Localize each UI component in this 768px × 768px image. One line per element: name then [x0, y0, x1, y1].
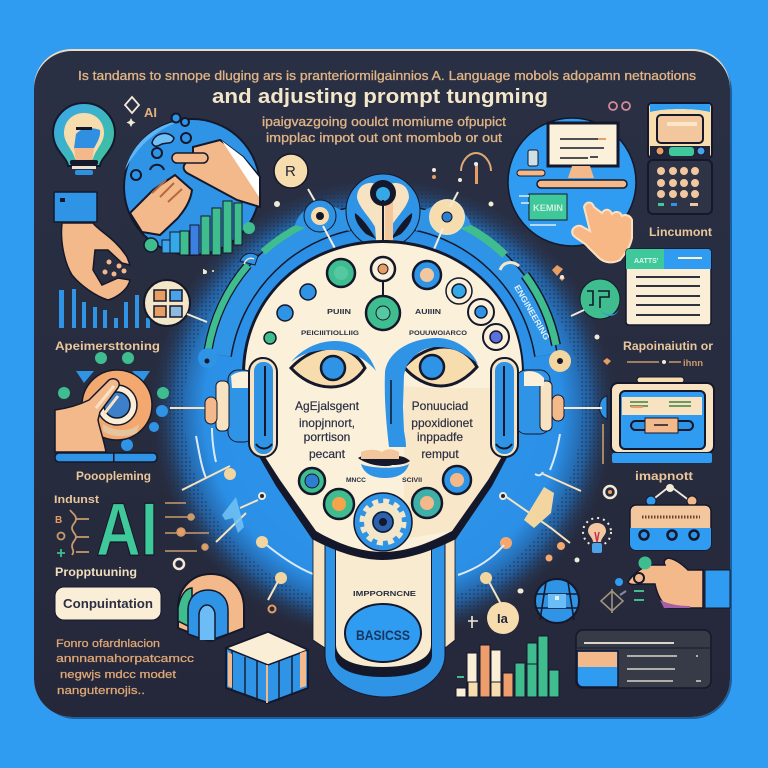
header text: [78, 68, 697, 145]
label: prompt tuning: Propptuuning: [55, 567, 137, 579]
jaw side bands: [272, 468, 496, 538]
text on left cheek: AgEjalsgent: [295, 399, 360, 413]
icon: gauge: [432, 153, 494, 206]
button: computation: Conpuintation: [63, 596, 153, 611]
button: computation: [55, 587, 161, 620]
antenna node left: [295, 200, 354, 254]
icon: hand pressing dial: [55, 352, 169, 462]
text on right cheek: remput: [421, 447, 459, 461]
icon: compass mark: [601, 589, 623, 613]
chin sensors and gear: [299, 466, 471, 551]
icon: sparkles and AI label: AI: [144, 105, 157, 120]
small ring ornament: [174, 559, 184, 569]
title: and adjusting prompt tungming: [212, 86, 548, 108]
text on right cheek: [411, 399, 473, 461]
button: basics: [345, 604, 421, 662]
chart: colored bars: [456, 636, 559, 697]
icon: hand with ball: [615, 556, 730, 608]
icon: node device: [630, 484, 711, 550]
icon: hand holding particles: [54, 192, 130, 300]
connector: ihnn label: [603, 358, 703, 369]
chart: small blue bars: [59, 289, 150, 328]
right headphone: [491, 350, 571, 457]
head small labels: PUIIN: [327, 309, 351, 316]
head small labels: POUUWOIARCO: [409, 330, 467, 337]
text on left cheek: [295, 399, 360, 461]
head glow: [148, 175, 618, 645]
left headphone: [198, 348, 277, 457]
card: dark panel with swatch: [576, 630, 711, 688]
intro line: Is tandams to snnope dluging ars is pranteriormilgainnios A. Language mobols adopamn netnaotions: [78, 68, 697, 83]
connector glyphs left of AI: [55, 510, 89, 557]
icon: device panel: [648, 103, 712, 214]
text on right cheek: Ponuuciad: [412, 399, 468, 413]
label: right middle: Rapoinaiutin or: [623, 341, 714, 353]
head sensors: [264, 257, 509, 350]
head shape: [242, 240, 524, 560]
icon: green circles dots right top: [609, 102, 630, 110]
connector: ihnn label: ihnn: [683, 358, 703, 369]
footer text left: [56, 638, 195, 697]
big AI logo: AI: [96, 487, 158, 571]
text on left cheek: inopjnnort,: [299, 416, 355, 430]
right eye and nose: [385, 338, 478, 447]
icon: Ia badge: [468, 588, 524, 634]
outer ring around head: [208, 216, 556, 355]
lower hand: [130, 175, 192, 235]
footer text left: Fonro ofardnlacion: [56, 638, 160, 650]
orbit lines and nodes left: [170, 408, 313, 612]
icon: globe: [535, 579, 579, 623]
icon: document card: AATTS': [634, 258, 659, 265]
text on left cheek: porrtison: [304, 430, 350, 444]
icon: small light bulb: [583, 518, 611, 553]
icon: diamond dot: [552, 265, 565, 281]
icon: console device: [564, 377, 714, 464]
upper hand: [184, 140, 260, 207]
label: left upper: Apeimersttoning: [55, 341, 160, 353]
footer text left: nanguternojis..: [57, 685, 145, 697]
head small labels: AUIIIN: [415, 309, 441, 316]
small dots decoration: [203, 201, 280, 274]
connector lines right of AI: [165, 503, 209, 551]
head small labels: PEICIIITIOLLIIG: [301, 330, 359, 337]
icon: speech bubble: [571, 279, 620, 340]
connector glyphs left of AI: B: [55, 515, 62, 526]
antenna node right: [412, 192, 471, 254]
label: right upper: Lincumont: [649, 227, 712, 239]
head small labels: SCIVII: [402, 478, 422, 484]
text on left cheek: pecant: [309, 447, 346, 461]
head small labels: [301, 309, 467, 484]
label: industry: Indunst: [54, 494, 99, 506]
head small labels: MNCC: [346, 478, 367, 484]
ring label: ENGINEERING: [512, 283, 552, 342]
icon: letter R badge: [274, 154, 316, 203]
button: basics: BASICSS: [356, 627, 410, 643]
subtitle line 2: impplac impot out ont mombob or out: [266, 131, 503, 145]
illustration: monitor and pointing hand: KEMIN: [533, 203, 563, 213]
nose and mouth: [358, 449, 410, 478]
icon: grid circle: [144, 280, 207, 326]
main dark panel: [34, 49, 732, 719]
ring junctions left and right: [240, 253, 519, 270]
icon: arch block: [178, 574, 244, 641]
head top antenna: [346, 174, 420, 252]
footer text left: negwjs mdcc modet: [60, 669, 176, 681]
icon: Ia badge: Ia: [497, 611, 509, 626]
illustration: monitor and pointing hand: [508, 118, 636, 262]
bars: [162, 240, 172, 253]
icon: cube with stripes: [226, 632, 308, 703]
text on right cheek: inppadfe: [417, 430, 463, 444]
text on right cheek: ppoxidionet: [411, 416, 473, 430]
footer text left: annnamahorpatcamcc: [56, 653, 195, 665]
icon: light bulb: [53, 103, 115, 175]
icon: letter R badge: R: [285, 163, 296, 180]
subtitle line 1: ipaigvazgoing ooulct momiume ofpupict: [262, 115, 507, 129]
left eye: [291, 341, 376, 387]
orbit lines and nodes right: [458, 434, 616, 606]
label: right lower: imapnott: [635, 471, 693, 483]
label: neck: IMPPORNCNE: [353, 589, 416, 598]
neck and body: [313, 528, 455, 697]
label: left middle: Pooopleming: [76, 471, 151, 483]
illustration: hands and growth chart: [124, 114, 260, 255]
icon: sparkles and AI label: [125, 97, 157, 127]
icon: translucent letter A left: [222, 497, 244, 533]
icon: document card: [626, 249, 711, 325]
